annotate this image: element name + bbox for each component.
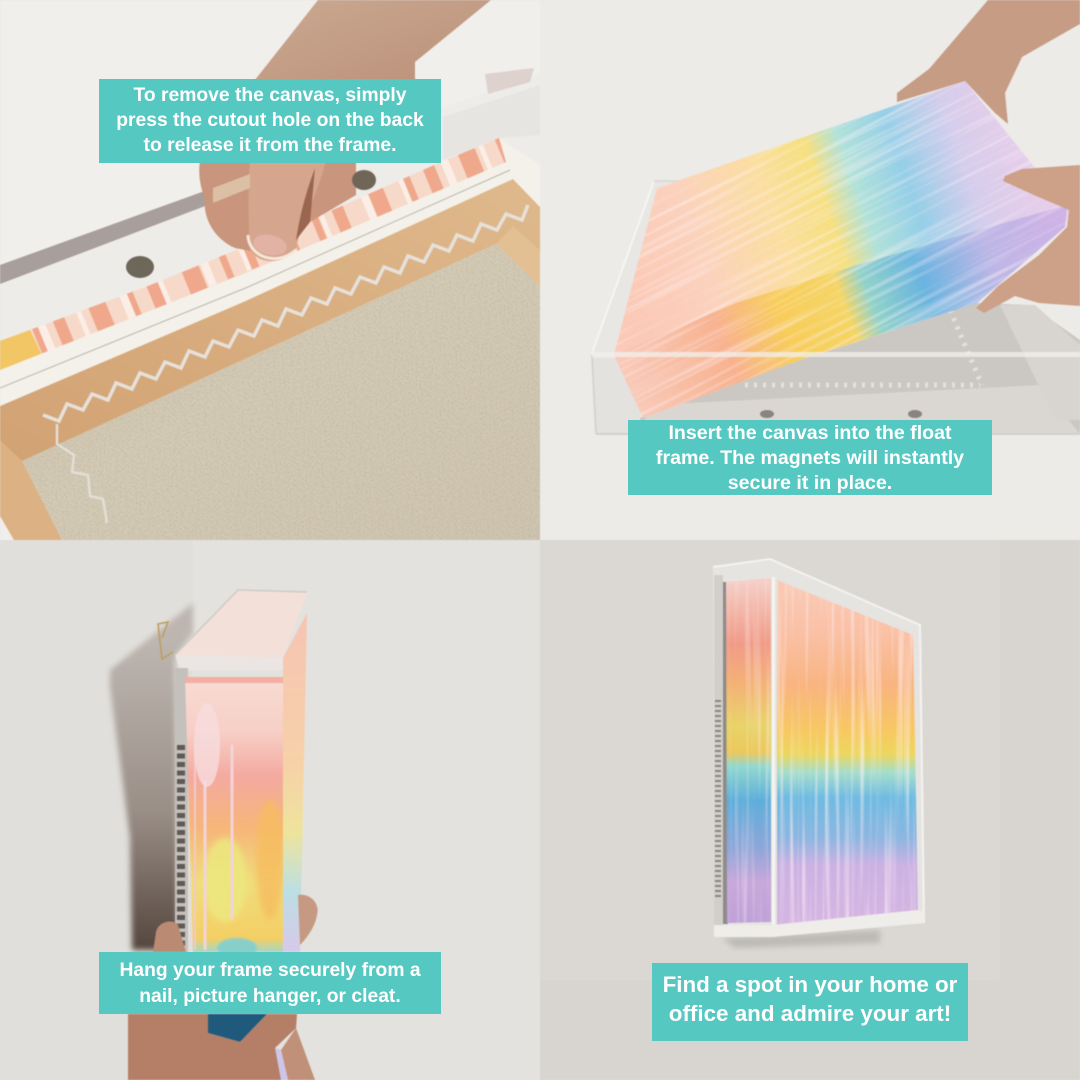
painted canvas side	[726, 578, 772, 924]
lilac canvas sliver	[275, 1048, 288, 1080]
panel: hang the frame photo	[106, 589, 318, 1080]
clear acrylic float frame	[592, 181, 1080, 434]
icon: hand holding the frame	[128, 1014, 297, 1080]
wall shadow	[110, 603, 193, 950]
acrylic front rim	[592, 352, 1080, 357]
acrylic frame top	[175, 590, 307, 670]
panel: insert the canvas photo	[590, 0, 1080, 435]
callout: remove the canvas	[99, 79, 441, 163]
curled tape scrap	[57, 424, 107, 523]
callout: hang the frame: Hang your frame securely from a	[119, 960, 421, 981]
wall shadow under frame	[722, 930, 880, 948]
picture hanger	[158, 622, 173, 659]
callout: hang the frame: nail, picture hanger, or cleat.	[139, 986, 401, 1007]
acrylic frame edge with magnets strip	[175, 668, 188, 953]
callout: admire your art	[652, 963, 968, 1041]
zigzag tape edge	[43, 205, 528, 421]
dark blue canvas bottom	[208, 1014, 267, 1042]
callout: remove the canvas: To remove the canvas, simply	[134, 85, 406, 106]
painted canvas held at an angle	[614, 81, 1069, 418]
callout: insert the canvas: secure it in place.	[728, 472, 892, 494]
painted canvas front	[775, 575, 920, 930]
callout: remove the canvas: to release it from the frame.	[144, 135, 396, 156]
callout: remove the canvas: press the cutout hole on the back	[116, 110, 424, 131]
callout: insert the canvas: Insert the canvas into the float	[668, 422, 952, 444]
icon: forearm	[281, 1028, 315, 1080]
callout: admire your art: office and admire your art!	[669, 1001, 951, 1026]
icon: hand forearm	[251, 0, 491, 85]
painted canvas edge stripes	[0, 138, 510, 372]
icon: magnet left	[126, 256, 154, 278]
icon: thumb and finger gripping frame	[153, 895, 318, 952]
painted canvas front face	[185, 677, 284, 958]
burlap canvas backing	[0, 240, 540, 540]
panel: finished frame on wall photo	[540, 540, 1080, 1080]
icon: top hand	[897, 0, 1080, 124]
acrylic frame	[713, 559, 924, 937]
callout: admire your art: Find a spot in your home or	[663, 972, 957, 997]
painted canvas side face	[283, 613, 307, 952]
acrylic front edge and base	[714, 577, 924, 937]
paper tape strip	[0, 169, 510, 389]
panel: remove the canvas photo	[0, 0, 540, 540]
icon: magnet right	[352, 170, 376, 190]
callout: insert the canvas: frame. The magnets will instantly	[656, 447, 964, 469]
wooden stretcher frame	[0, 179, 540, 540]
callout: insert the canvas	[628, 420, 992, 495]
icon: right hand	[976, 165, 1080, 313]
clear acrylic back plate	[0, 68, 540, 284]
icon: hand pressing the cutout	[199, 160, 356, 261]
callout: hang the frame	[99, 952, 441, 1014]
